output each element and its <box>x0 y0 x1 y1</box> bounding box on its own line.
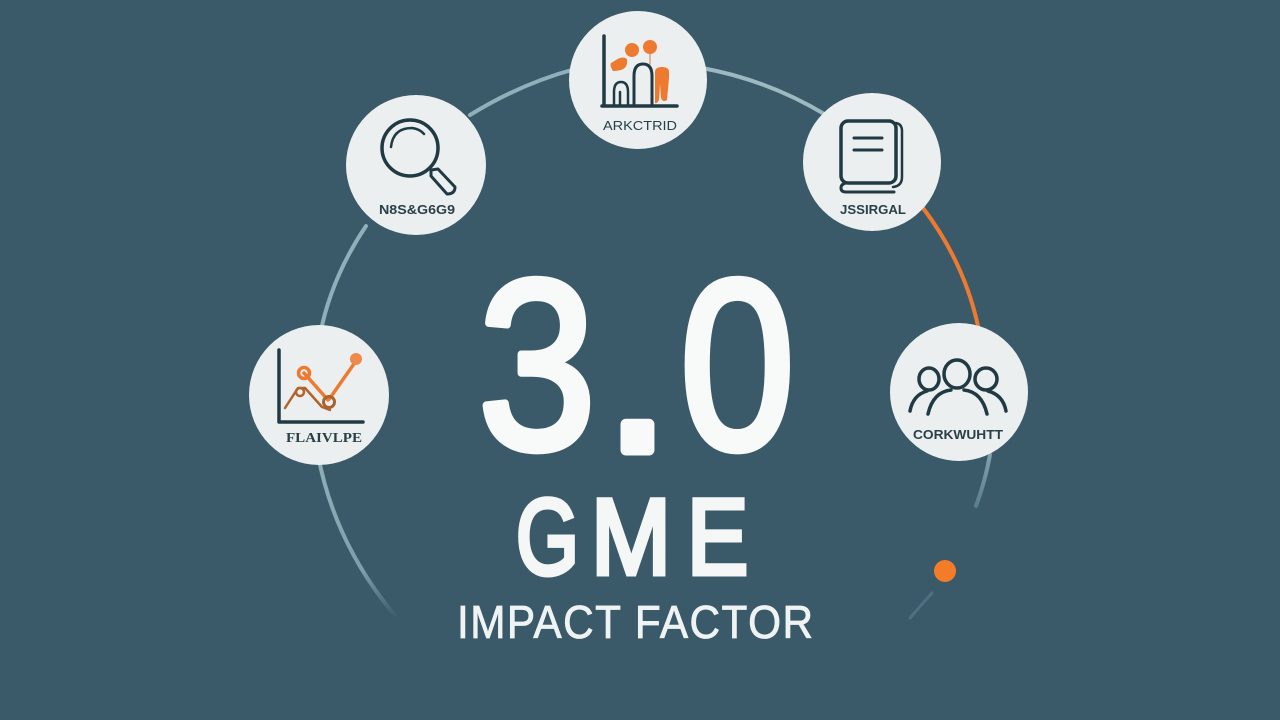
label: ARKCTRID <box>603 118 677 133</box>
orange progress dot <box>934 560 956 582</box>
icon: people <box>910 360 1006 414</box>
caption: impact factor: IMPACT FACTOR <box>457 597 813 648</box>
node: line chart <box>249 325 389 465</box>
big number: . <box>604 233 671 502</box>
big number: 3 <box>478 231 596 500</box>
label: N8S&G6G9 <box>379 202 455 217</box>
subtitle: GME <box>516 476 748 598</box>
icon: book <box>841 121 902 192</box>
node: journal <box>803 93 941 231</box>
node: magnifier <box>346 95 486 235</box>
progress ring <box>318 68 990 618</box>
label: FLAIVLPE <box>286 431 362 446</box>
icon: trend chart <box>279 350 363 422</box>
node: bar chart <box>569 11 707 149</box>
node: community <box>890 323 1028 461</box>
big number: 0 <box>680 230 795 500</box>
subtitle: GME: M <box>591 476 671 597</box>
big number <box>478 230 795 502</box>
icon: magnifying glass <box>382 120 455 194</box>
subtitle: GME: E <box>687 477 748 598</box>
label: CORKWUHTT <box>913 427 1003 442</box>
subtitle: GME: G <box>516 478 579 598</box>
icon: bars and flowers <box>602 36 677 106</box>
label: JSSIRGAL <box>840 202 906 217</box>
